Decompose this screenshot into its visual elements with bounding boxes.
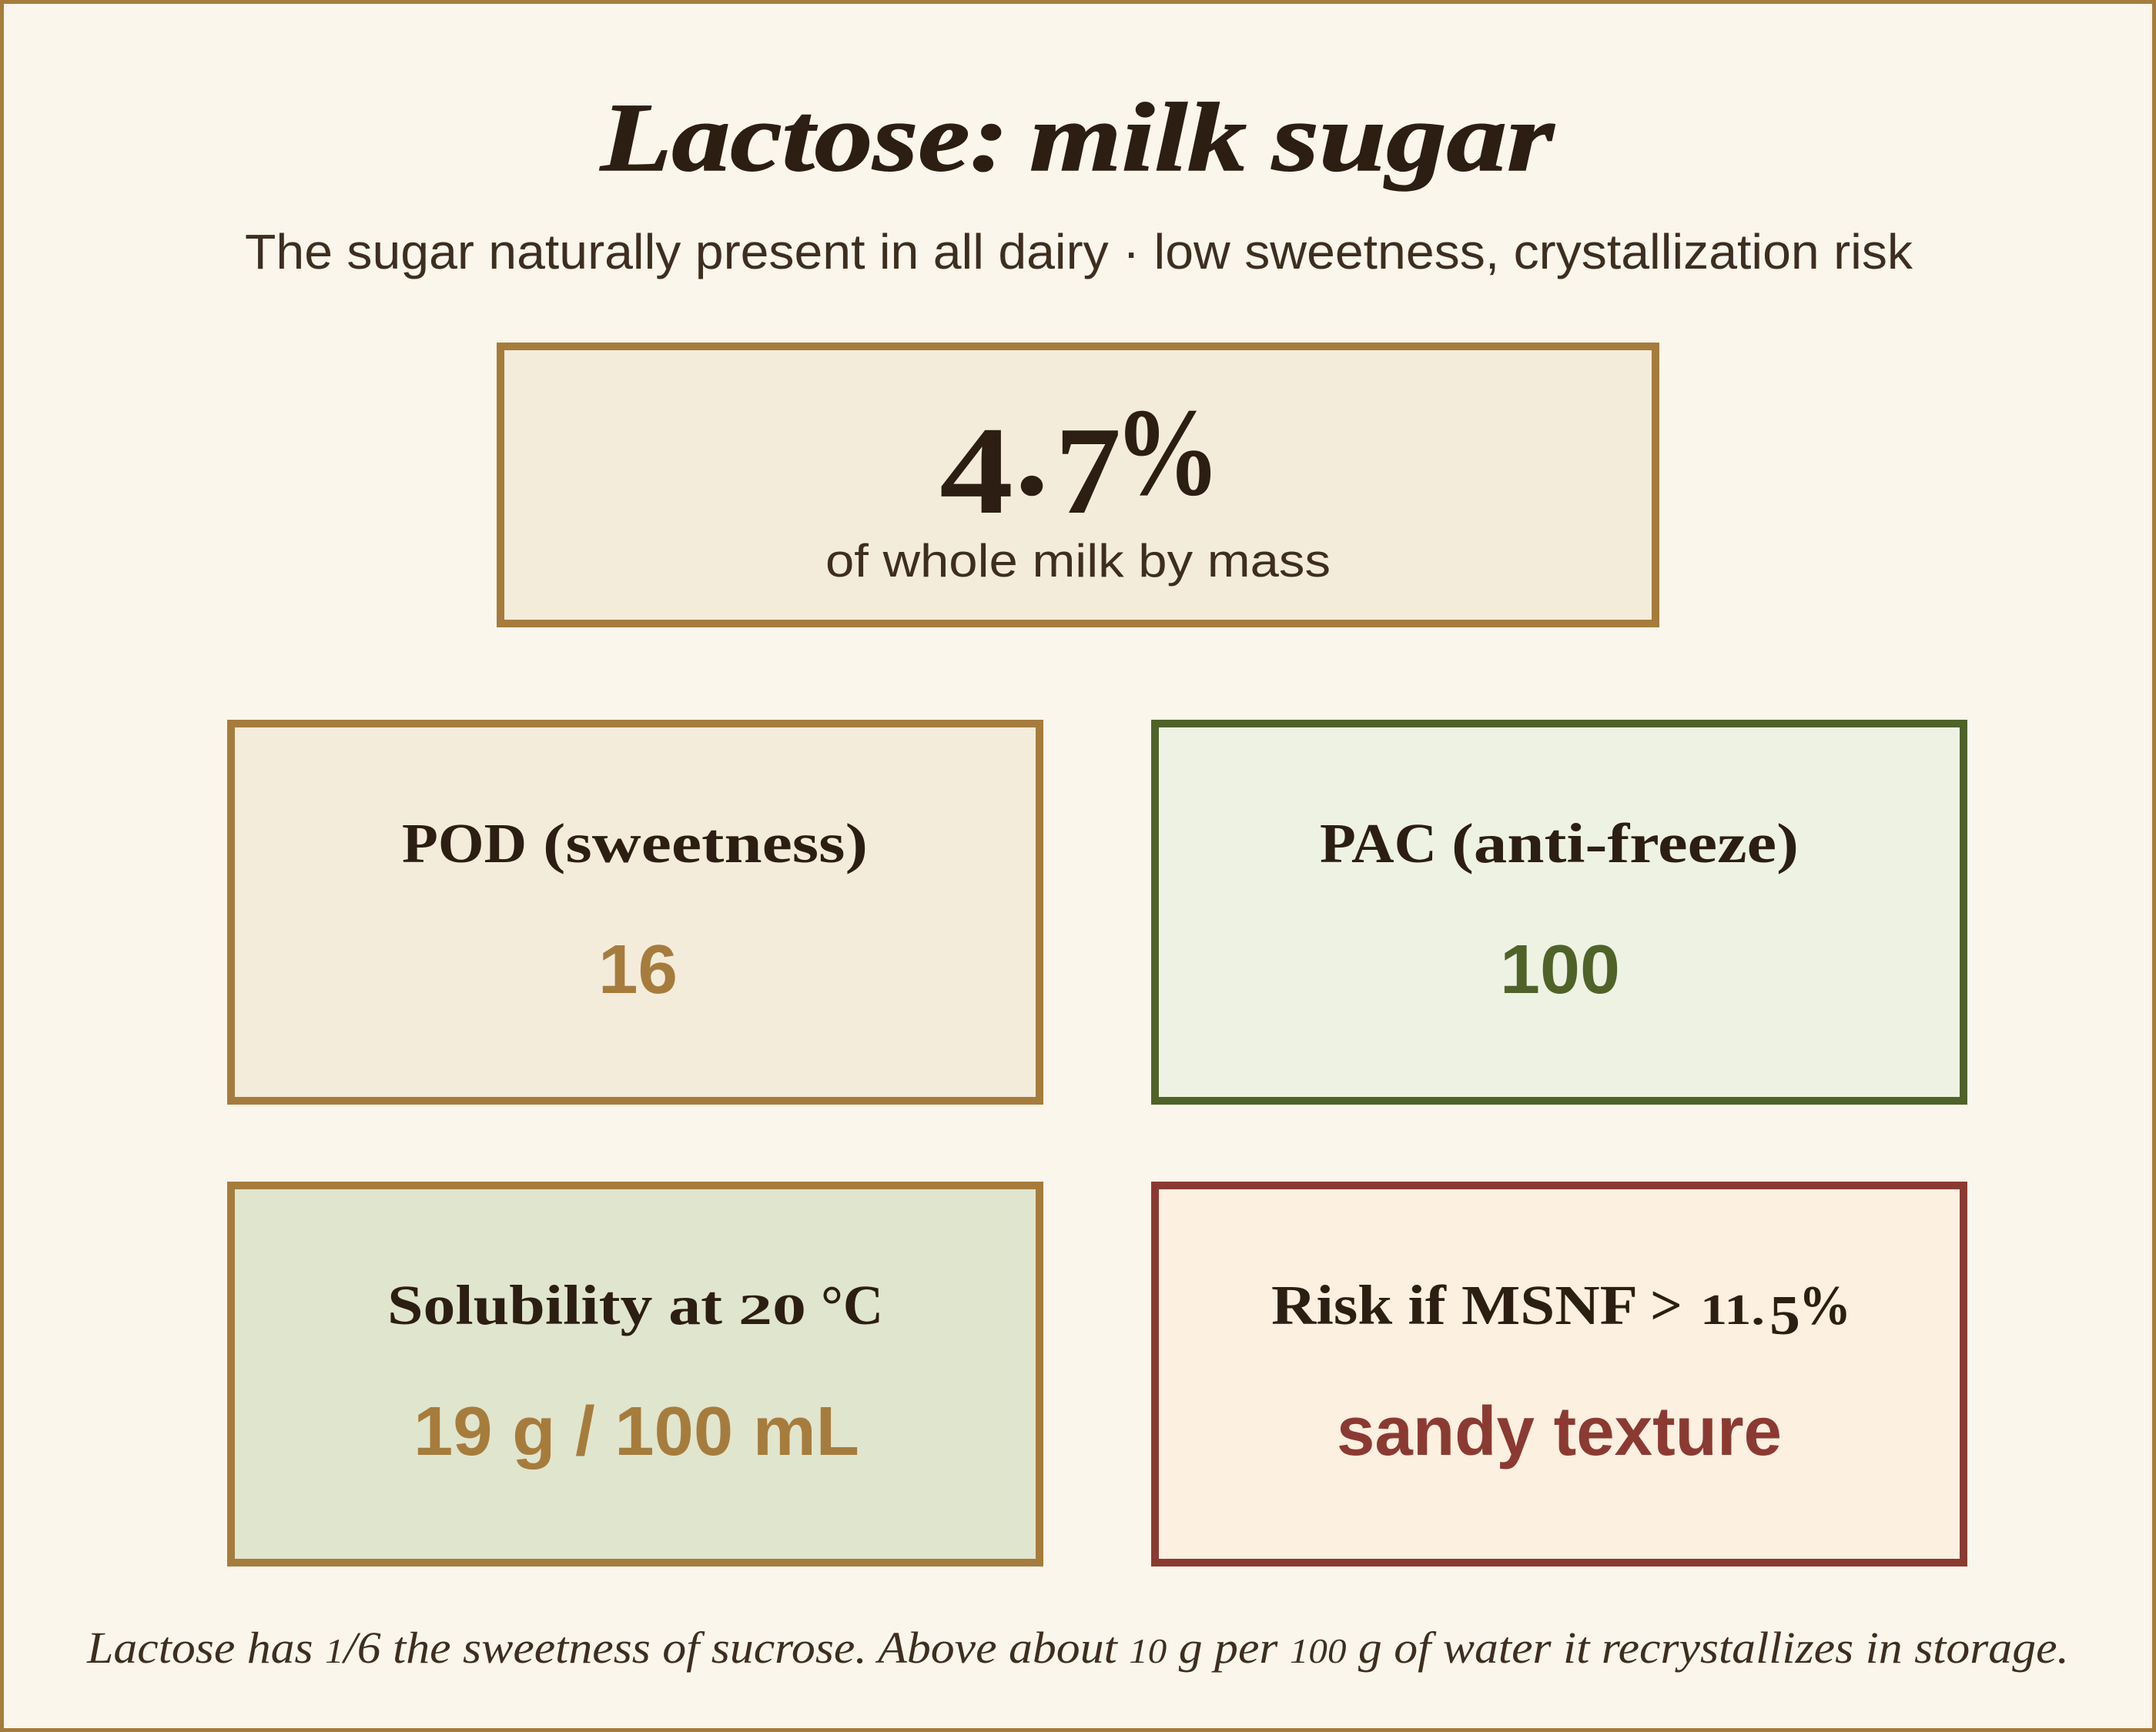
risk card background: [1155, 1185, 1964, 1563]
solubility label: [387, 1274, 883, 1336]
hero panel background: [500, 346, 1656, 624]
title: milk: [1029, 84, 1247, 192]
title: [600, 84, 1555, 192]
panel: PAC anti-freeze: [1155, 724, 1964, 1101]
POD label: [402, 812, 868, 874]
PAC label: PAC: [1320, 812, 1437, 874]
panel: POD sweetness: [231, 724, 1040, 1101]
panel: hero statistic: [500, 346, 1656, 624]
risk label: Risk if MSNF: [1271, 1274, 1638, 1336]
hero value: .: [1015, 383, 1049, 522]
footnote: Lactose has 1/6 the sweetness of sucrose. Above about 10 g per 100 g of water it recrystallizes in storage.: [86, 1623, 2069, 1673]
PAC label: (anti-freeze): [1451, 812, 1799, 874]
risk value: sandy texture: [1337, 1393, 1782, 1470]
risk label: 5: [1769, 1284, 1800, 1346]
panel: risk: [1155, 1185, 1964, 1563]
solubility value: 19 g / 100 mL: [413, 1393, 859, 1470]
title: sugar: [1271, 84, 1555, 192]
PAC card background: [1155, 724, 1964, 1101]
PAC value: 100: [1500, 931, 1620, 1008]
POD label: (sweetness): [543, 812, 868, 874]
hero value: %: [1114, 383, 1220, 522]
risk label: [1271, 1274, 1851, 1346]
hero value: 4: [939, 402, 1013, 540]
hero value: [939, 383, 1220, 540]
risk label: %: [1799, 1274, 1851, 1336]
subtitle: The sugar naturally present in all dairy · low sweetness, crystallization risk: [245, 224, 1913, 279]
risk label: 11.: [1700, 1286, 1765, 1334]
solubility label: °C: [821, 1274, 883, 1336]
PAC label: [1320, 812, 1799, 874]
risk label: >: [1650, 1274, 1682, 1336]
POD value: 16: [598, 931, 678, 1008]
solubility label: 20: [738, 1286, 806, 1334]
hero caption: of whole milk by mass: [825, 535, 1331, 587]
hero value: 7: [1055, 402, 1121, 540]
solubility card background: [231, 1185, 1040, 1563]
panel: solubility: [231, 1185, 1040, 1563]
solubility label: Solubility at: [387, 1274, 722, 1336]
POD label: POD: [402, 812, 527, 874]
POD card background: [231, 724, 1040, 1101]
title: Lactose:: [600, 84, 1009, 192]
